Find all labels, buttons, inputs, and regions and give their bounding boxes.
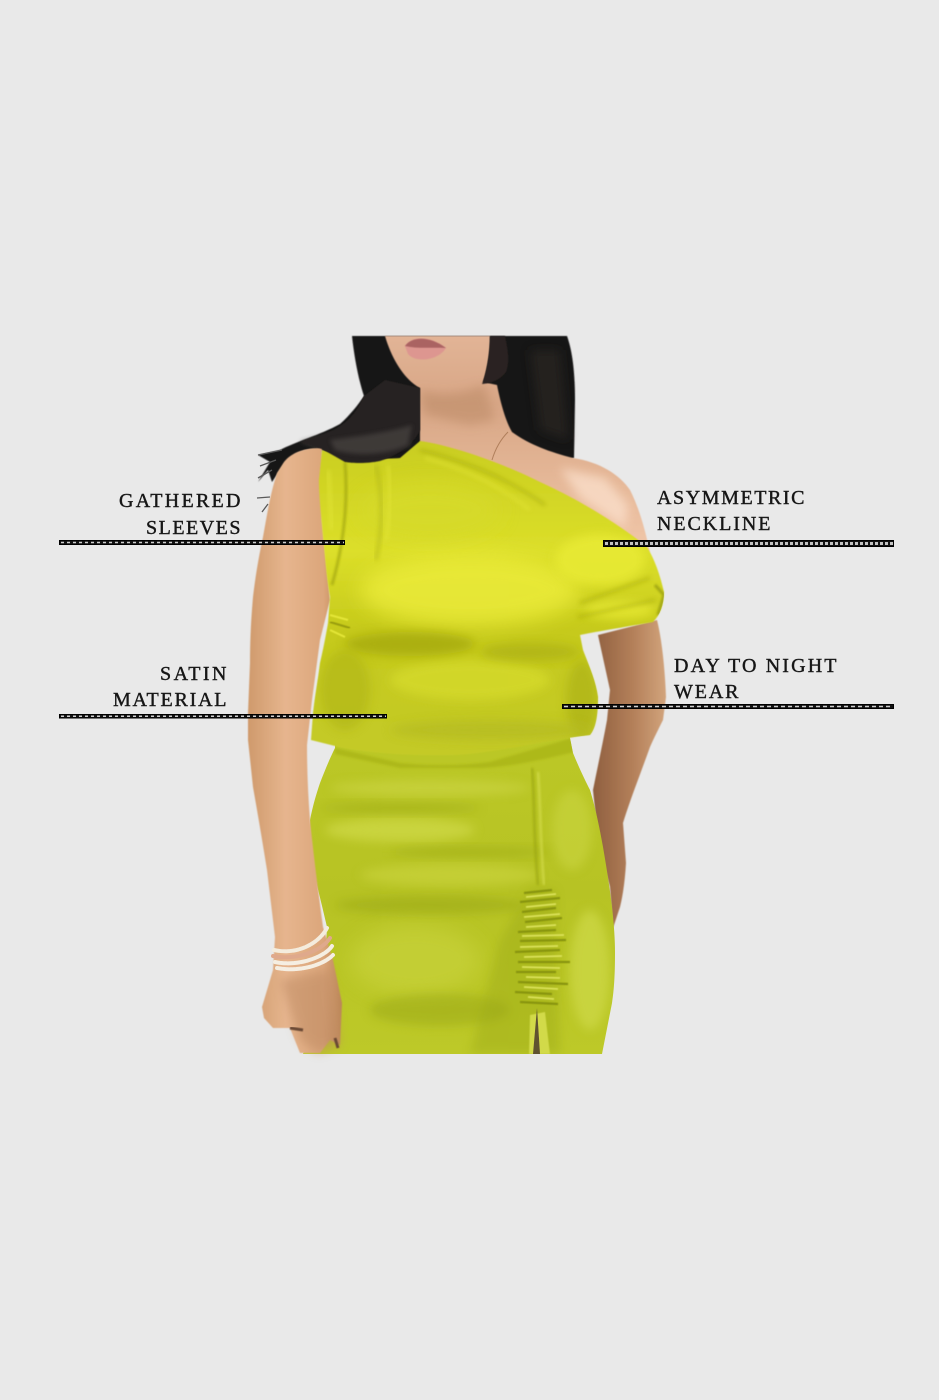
hair sheen over shoulder [330, 425, 412, 454]
skirt slit [529, 1012, 550, 1054]
side seam [532, 768, 538, 885]
ruched gathers [515, 890, 570, 1004]
right hair sheen [530, 350, 568, 440]
callout: day to night wear [562, 655, 894, 708]
label [113, 663, 226, 711]
necklace [492, 432, 508, 460]
neck shadow under chin [420, 384, 495, 425]
bracelet [273, 928, 333, 969]
neckline folds [420, 450, 545, 505]
flyaway hair strands [257, 450, 282, 512]
neck and face [385, 336, 650, 560]
skirt [303, 728, 615, 1054]
label: WEAR [674, 681, 739, 703]
leader line [60, 714, 386, 718]
label: DAY TO NIGHT [674, 655, 836, 677]
upper lip [405, 339, 446, 348]
label: SLEEVES [146, 517, 240, 539]
hair over shoulder [300, 380, 420, 463]
skirt fabric highlights [325, 818, 475, 842]
top garment [311, 441, 664, 755]
callout: asymmetric neckline [604, 487, 894, 546]
left arm and hand [248, 448, 342, 1053]
label [657, 487, 804, 535]
label: NECKLINE [657, 513, 770, 535]
top highlights [360, 554, 580, 626]
waistband [335, 738, 574, 768]
label: SATIN [160, 663, 226, 685]
leader line [60, 540, 344, 544]
shoulder highlight [560, 468, 628, 528]
callout: gathered sleeves [60, 490, 344, 544]
hand shading [280, 970, 340, 1053]
right arm [593, 620, 666, 928]
label [119, 490, 240, 539]
label: ASYMMETRIC [657, 487, 804, 509]
lips [405, 339, 446, 360]
callout: satin material [60, 663, 386, 718]
gathered sleeve folds [332, 462, 346, 585]
side gathers [330, 615, 348, 637]
hair highlights [300, 420, 412, 455]
leader line [604, 540, 894, 546]
leader line [562, 704, 894, 708]
skirt fabric shadows [335, 896, 525, 914]
ring and nail details [290, 1028, 338, 1048]
top shadows [345, 632, 475, 656]
label: MATERIAL [113, 689, 226, 711]
model photo figure [248, 336, 666, 1054]
sleeve drape folds [578, 578, 655, 617]
label [674, 655, 836, 703]
label: GATHERED [119, 490, 240, 512]
hair [258, 336, 575, 482]
front hair lock [482, 336, 508, 384]
